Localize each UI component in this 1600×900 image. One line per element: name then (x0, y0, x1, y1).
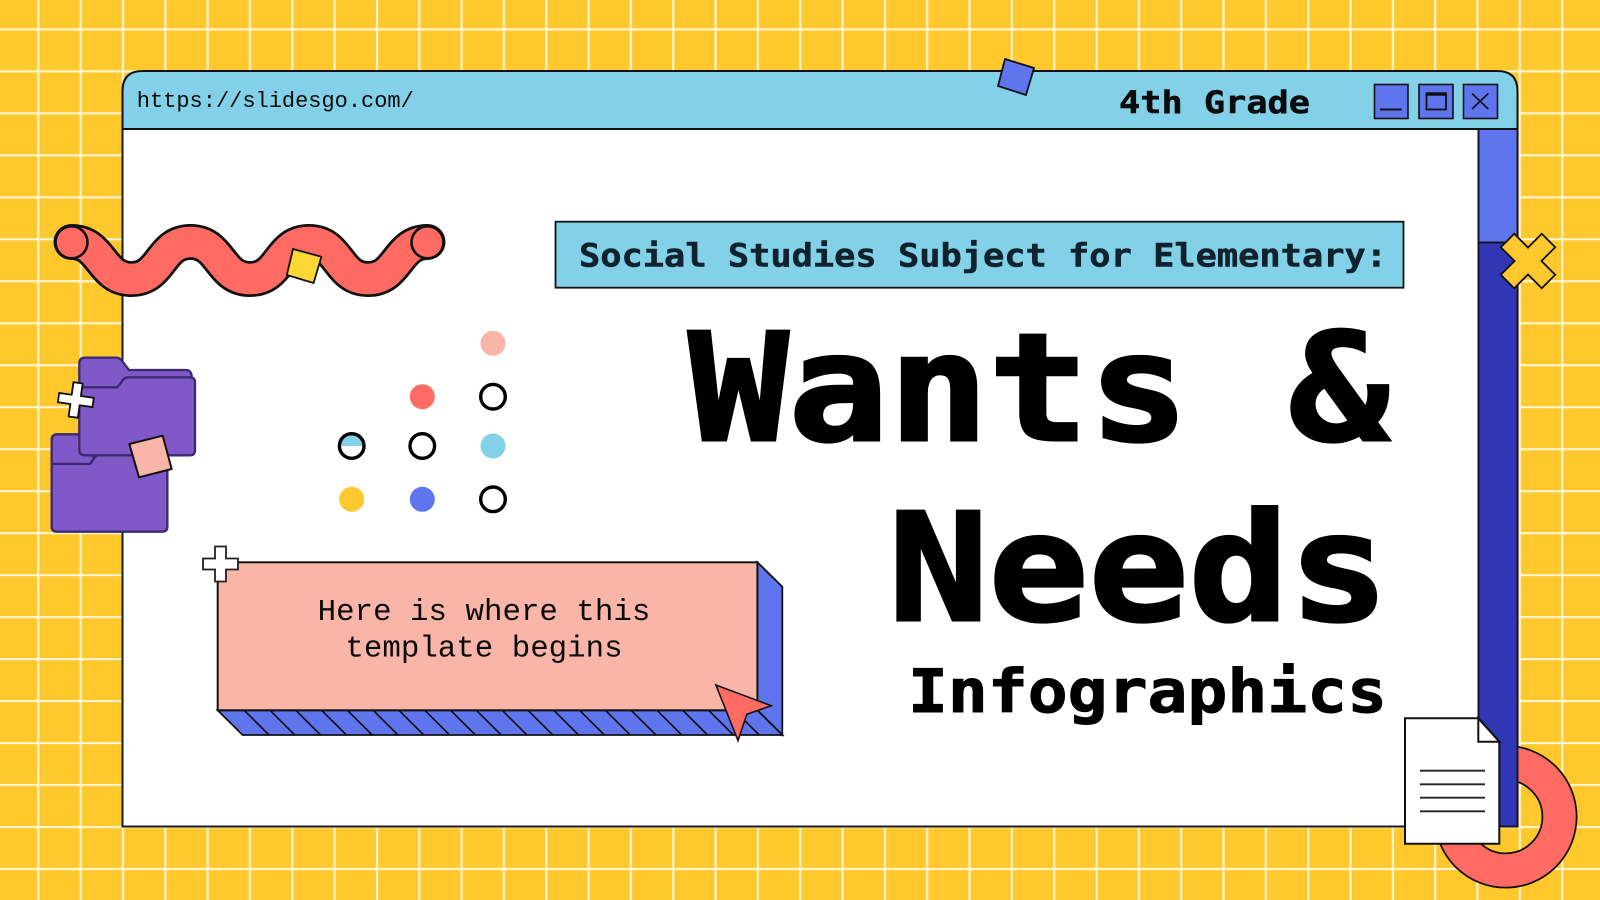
subtitle banner: Social Studies Subject for Elementary: (579, 238, 1387, 274)
icon: white plus on card (203, 546, 238, 582)
card text (318, 595, 650, 667)
card depth bottom hatched (218, 710, 782, 735)
subtitle banner (556, 222, 1404, 288)
card text: Here is where this (318, 595, 650, 630)
lower folder (52, 434, 167, 532)
maximise button (1419, 84, 1453, 118)
icon: blue square on title bar (998, 59, 1034, 95)
wavy shape (56, 226, 444, 279)
browser window (122, 71, 1518, 826)
icon: yellow square on wave (287, 249, 321, 283)
scrollbar thumb (1478, 129, 1518, 242)
scrollbar track (1478, 129, 1518, 826)
title line: Wants &: Wants & (688, 302, 1390, 476)
title line: Infographics: Infographics (908, 658, 1387, 727)
text card (218, 562, 782, 735)
card text: template begins (345, 632, 623, 667)
title bar (122, 71, 1518, 129)
url text: https://slidesgo.com/ (137, 89, 414, 114)
icon: red ring (1452, 763, 1559, 870)
minimise button (1374, 84, 1408, 118)
dot grid (339, 331, 506, 512)
close button (1464, 84, 1498, 118)
white plus (56, 380, 96, 420)
icon: red ring fill (1452, 763, 1559, 870)
grade label: 4th Grade (1119, 85, 1310, 121)
card depth right (757, 562, 782, 735)
card face (218, 562, 757, 710)
pink square (129, 436, 172, 477)
upper folder (79, 358, 195, 455)
icon: cursor arrow (716, 685, 771, 741)
icon: document (1405, 718, 1499, 844)
title line: Needs: Needs (888, 482, 1389, 656)
icon: folders (52, 358, 195, 532)
icon: yellow cross (1487, 220, 1569, 302)
window body (122, 127, 1518, 826)
